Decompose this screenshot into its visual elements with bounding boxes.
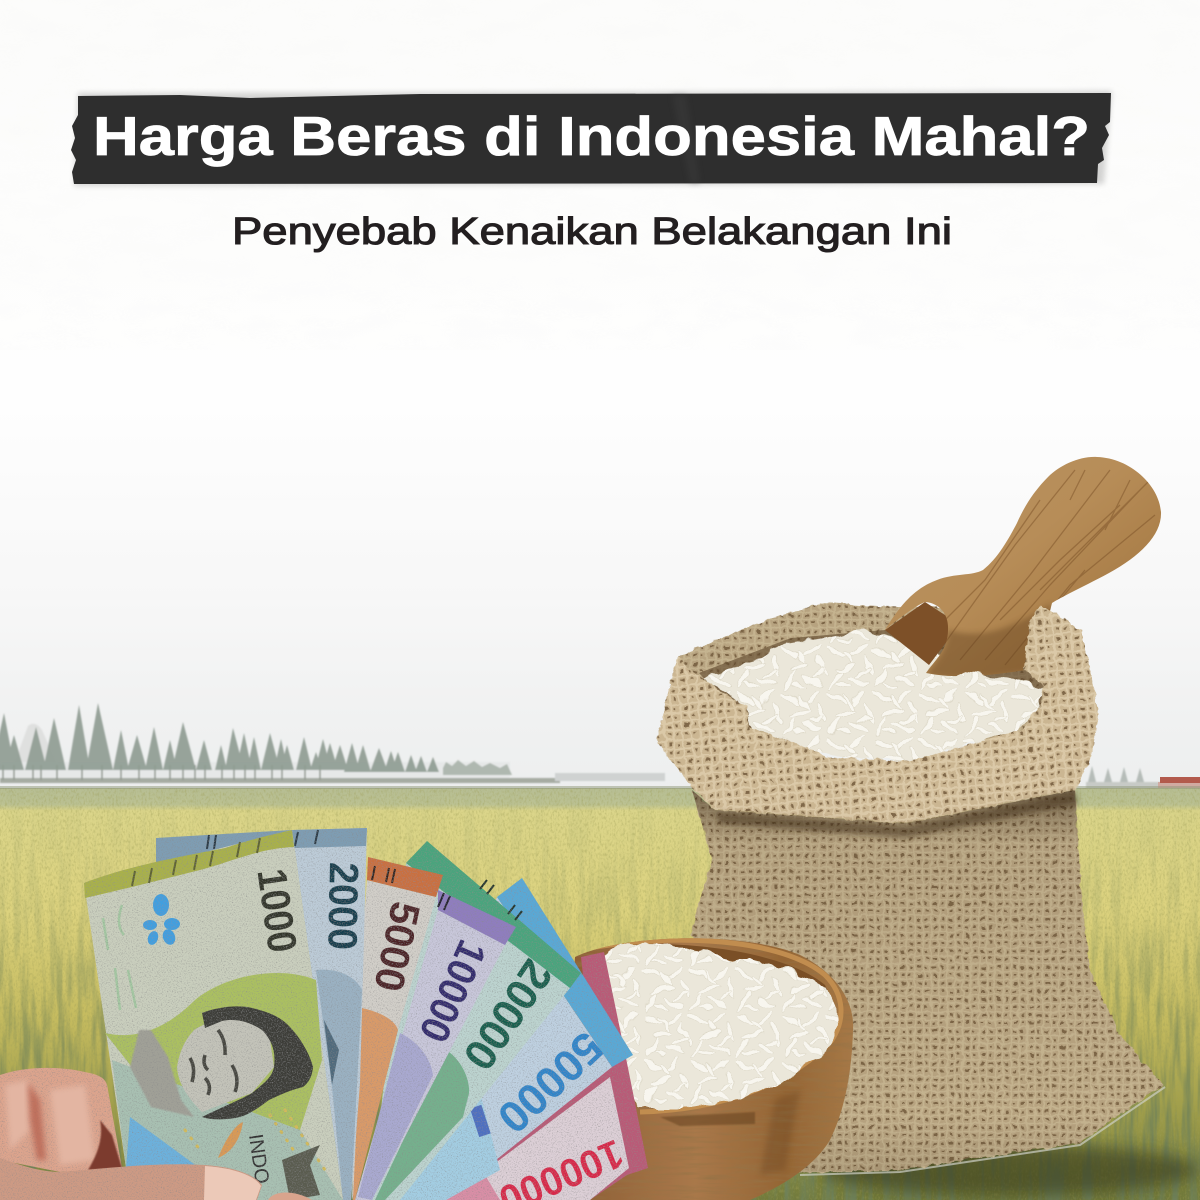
palm xyxy=(0,1068,122,1172)
national emblem xyxy=(282,1145,320,1200)
torn black tape xyxy=(71,91,1112,186)
rice in sack xyxy=(703,630,1044,762)
sack right rim xyxy=(1024,605,1099,790)
banknote 5000: 5000 xyxy=(365,898,429,995)
banknote 1000 xyxy=(84,830,343,1200)
thumb xyxy=(0,1158,262,1200)
banknote 50000 xyxy=(380,878,633,1200)
hand holding the banknotes xyxy=(0,1068,312,1200)
finger xyxy=(268,1192,312,1200)
banknote 100000 xyxy=(440,952,648,1200)
sack front fold xyxy=(657,657,1099,838)
fan of rupiah banknotes xyxy=(84,828,648,1200)
rice sack with scoop xyxy=(657,450,1170,1175)
portrait xyxy=(130,1006,313,1119)
banknote 10000 xyxy=(355,890,516,1200)
banknote 2000 xyxy=(156,828,367,1200)
rice in bowl xyxy=(603,943,838,1107)
rice grains over scoop foot xyxy=(956,671,1043,690)
banknote 5000 xyxy=(352,857,443,1200)
rice field xyxy=(0,786,1200,1200)
background: paper sky xyxy=(0,600,1200,788)
banknote 1000: 1000 xyxy=(249,866,306,955)
sack body xyxy=(690,790,1165,1175)
wooden bowl of rice xyxy=(572,938,854,1200)
bowl body xyxy=(572,938,854,1200)
icon: blue flower emblem xyxy=(143,894,180,947)
emblem text: INDO xyxy=(244,1133,273,1185)
banknote 20000 xyxy=(372,841,581,1200)
banknote 20000: 20000 xyxy=(453,951,562,1078)
banknote 50000: 50000 xyxy=(488,1022,612,1142)
banknote 2000: 2000 xyxy=(319,862,367,950)
yellow dots xyxy=(185,1110,325,1175)
distant tree line xyxy=(0,704,1160,788)
wooden scoop xyxy=(885,456,1162,676)
title: Harga Beras di Indonesia Mahal? xyxy=(93,105,1090,167)
banknote 10000: 10000 xyxy=(410,934,495,1049)
subtitle: Penyebab Kenaikan Belakangan Ini xyxy=(232,211,952,253)
orange leaf mark xyxy=(218,1122,243,1158)
signature marks xyxy=(103,905,136,1010)
building: red farmhouse xyxy=(1158,777,1200,788)
sack opening interior xyxy=(699,630,1044,728)
sack shadow on field xyxy=(820,1144,1200,1196)
sack inner back rim xyxy=(657,603,1099,742)
